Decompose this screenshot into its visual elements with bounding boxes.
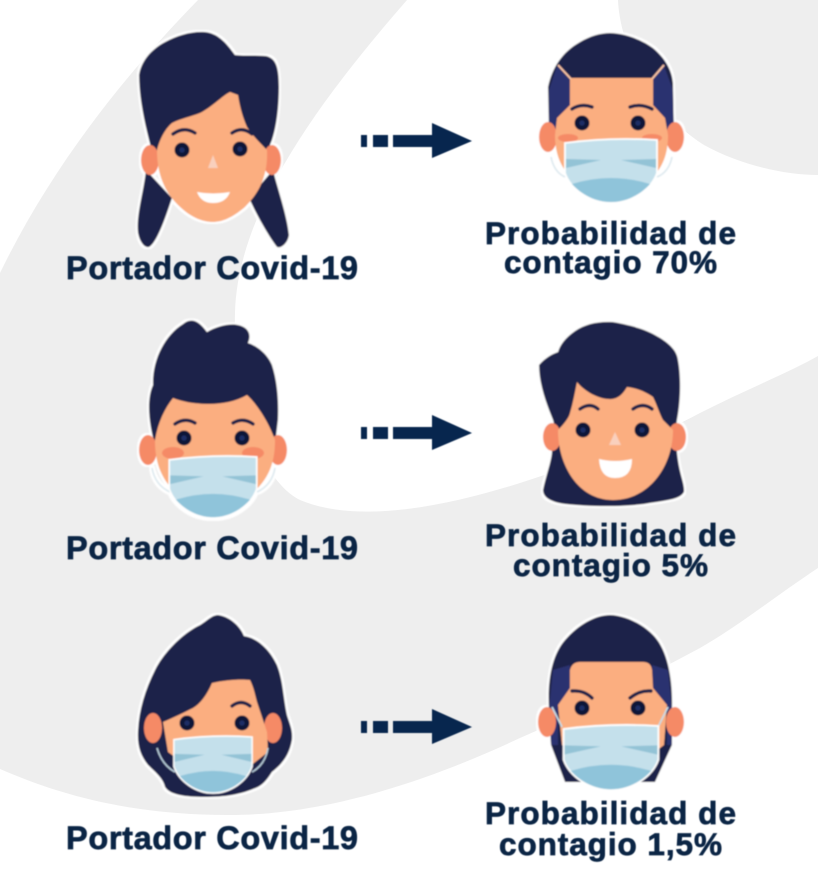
row 1 arrow (361, 123, 472, 158)
row 2 right caption: contagio 5% (513, 547, 708, 583)
row 2 right caption (485, 517, 736, 583)
row 3 left face: woman with mask (138, 615, 292, 797)
row 1 left face: woman without mask (138, 32, 289, 247)
row 1 right caption: contagio 70% (504, 244, 717, 280)
row 3 arrow (361, 709, 472, 744)
row 2 left caption: Portador Covid-19 (66, 530, 358, 566)
row 3 left caption: Portador Covid-19 (66, 820, 358, 856)
row 1 left caption: Portador Covid-19 (66, 250, 358, 286)
row 2 left face: man with mask (139, 320, 287, 518)
row 1 right caption: Probabilidad de (485, 215, 736, 251)
row 3 right face: man with mask (538, 615, 684, 790)
row 1 right caption (485, 215, 736, 280)
row 2 right face: woman without mask (539, 322, 686, 506)
row 1 right face: man with mask (539, 33, 684, 203)
row 2 arrow (361, 415, 472, 450)
row 3 right caption (485, 795, 736, 862)
row 3 right caption: contagio 1,5% (499, 826, 722, 862)
row 3 right caption: Probabilidad de (485, 795, 736, 831)
row 2 right caption: Probabilidad de (485, 517, 736, 553)
